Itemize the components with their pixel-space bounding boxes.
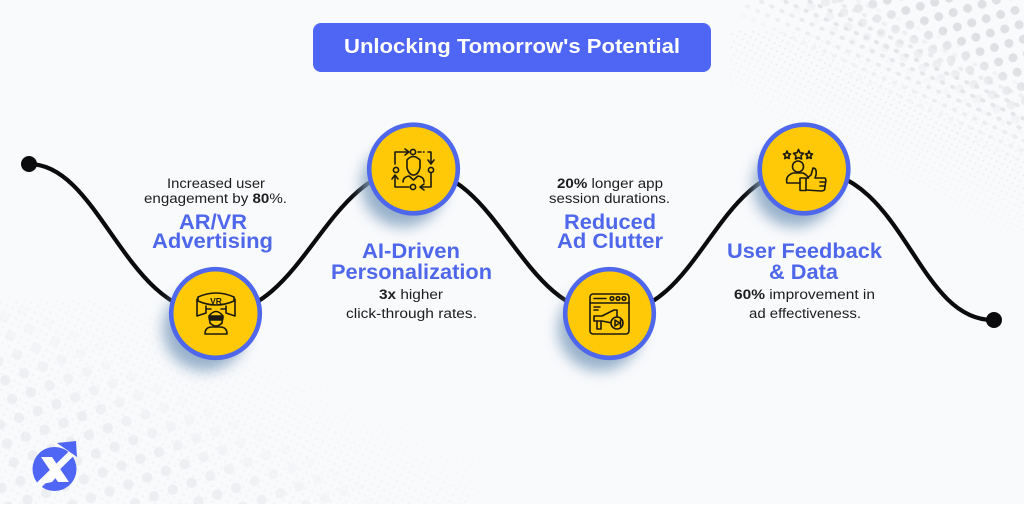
logo (32, 441, 77, 491)
badge (171, 269, 260, 358)
heading: AR/VR Advertising: Advertising (152, 230, 273, 253)
badge shadow (163, 287, 247, 371)
text: session stat (549, 176, 670, 206)
icon: VR headset user (197, 293, 235, 334)
heading: User Feedback & Data (727, 240, 882, 284)
text: effectiveness stat (734, 287, 875, 321)
step 4: User Feedback & Data (727, 125, 882, 321)
title banner (313, 23, 711, 72)
icon: personalization loop (392, 149, 434, 190)
badge (369, 125, 458, 213)
icon: ad window with megaphone (590, 294, 629, 334)
heading: AI-Driven Personalization (331, 240, 492, 284)
heading: Reduced Ad Clutter: Reduced (564, 211, 656, 234)
bottom strip (0, 504, 1024, 512)
step 1: AR/VR Advertising: engagement by 80%. (144, 191, 287, 206)
heading: AR/VR Advertising (152, 211, 273, 253)
heading: Reduced Ad Clutter: Ad Clutter (557, 230, 663, 253)
step 2: AI-Driven Personalization (331, 125, 492, 321)
badge shadow (558, 287, 642, 371)
text: session stat: 20% longer app (557, 176, 663, 191)
badge shadow (753, 143, 837, 227)
heading: AI-Driven Personalization: Personalization (331, 261, 492, 284)
icon: user with stars and thumbs up (784, 150, 826, 191)
text: click-through stat: 3x higher (379, 287, 444, 302)
title banner: Unlocking Tomorrow's Potential (344, 36, 680, 58)
badge shadow (361, 143, 445, 227)
text: click-through stat: click-through rates. (346, 306, 477, 321)
badge (760, 125, 848, 213)
text: session stat: session durations. (549, 191, 670, 206)
heading: AR/VR Advertising: AR/VR (179, 211, 247, 234)
text: AR/VR stat: Increased user (167, 176, 266, 191)
heading: AI-Driven Personalization: AI-Driven (362, 240, 460, 263)
heading: Reduced Ad Clutter (557, 211, 663, 253)
step 3: Reduced Ad Clutter (549, 176, 670, 371)
text: effectiveness stat: ad effectiveness. (749, 306, 861, 321)
badge (565, 269, 654, 358)
step 1: AR/VR Advertising (144, 176, 287, 371)
heading: User Feedback & Data: & Data (769, 261, 838, 284)
text: effectiveness stat: 60% improvement in (734, 287, 875, 302)
heading: User Feedback & Data: User Feedback (727, 240, 882, 263)
icon: VR headset user: VR (210, 296, 222, 306)
text: click-through stat (346, 287, 477, 321)
wavy timeline (21, 156, 1002, 328)
